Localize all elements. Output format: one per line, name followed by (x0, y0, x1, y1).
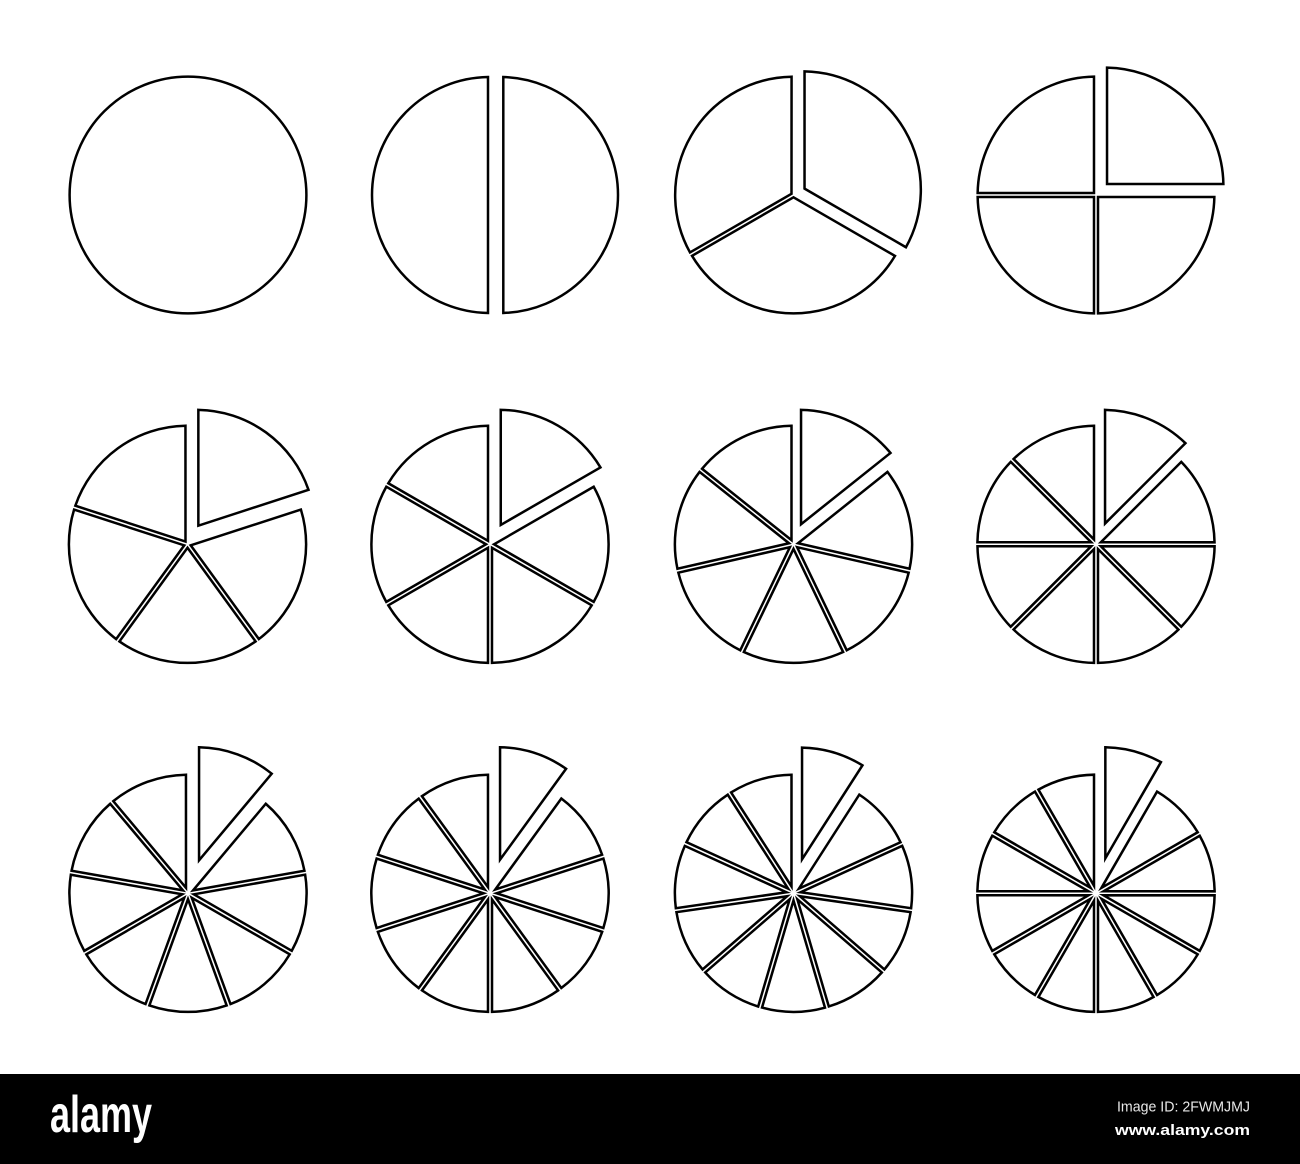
pie: 4 slices (978, 68, 1223, 313)
pie: 3 slices (632, 64, 921, 357)
exploded slice 1 of 2 (503, 77, 618, 313)
pie: 11 slices (663, 748, 927, 1025)
exploded slice 1 of 3 (805, 71, 921, 247)
pie: 12 slices (965, 747, 1227, 1025)
exploded slice 1 of 9 (199, 747, 272, 860)
exploded slice 1 of 6 (501, 410, 600, 525)
pie: 8 slices (954, 402, 1238, 686)
image id: Image ID: 2FWMJMJ (1117, 1098, 1250, 1116)
pie: 5 slices (27, 401, 335, 706)
exploded slice 1 of 4 (1107, 68, 1223, 184)
website: www.alamy.com (1114, 1122, 1250, 1139)
remaining slices of 8 (954, 402, 1238, 686)
remaining slices of 9 (48, 754, 321, 1030)
remaining slices of 10 (356, 757, 624, 1029)
remaining slices of 4 (978, 77, 1214, 313)
remaining slices of 3 (632, 64, 895, 357)
remaining slices of 11 (663, 760, 927, 1025)
exploded slice 1 of 7 (801, 410, 890, 524)
pie: 9 slices (48, 747, 321, 1030)
logo: alamy: alamy (50, 1086, 152, 1144)
exploded slice 1 of 10 (500, 747, 566, 860)
pie: 7 slices (658, 399, 943, 691)
remaining slices of 2 (372, 77, 488, 313)
remaining slices of 7 (658, 399, 943, 691)
pie: 6 slices (336, 397, 644, 692)
exploded slice 1 of 8 (1105, 410, 1185, 524)
pie: whole circle (70, 77, 306, 313)
remaining slices of 12 (965, 762, 1227, 1025)
exploded slice 1 of 12 (1105, 747, 1161, 858)
exploded slice 1 of 5 (198, 410, 309, 526)
remaining slices of 6 (336, 397, 644, 692)
remaining slices of 5 (27, 401, 335, 706)
exploded slice 1 of 11 (802, 748, 862, 859)
pie: 10 slices (356, 747, 624, 1029)
pie: 2 slices (372, 77, 618, 313)
footer bar (0, 1074, 1300, 1164)
